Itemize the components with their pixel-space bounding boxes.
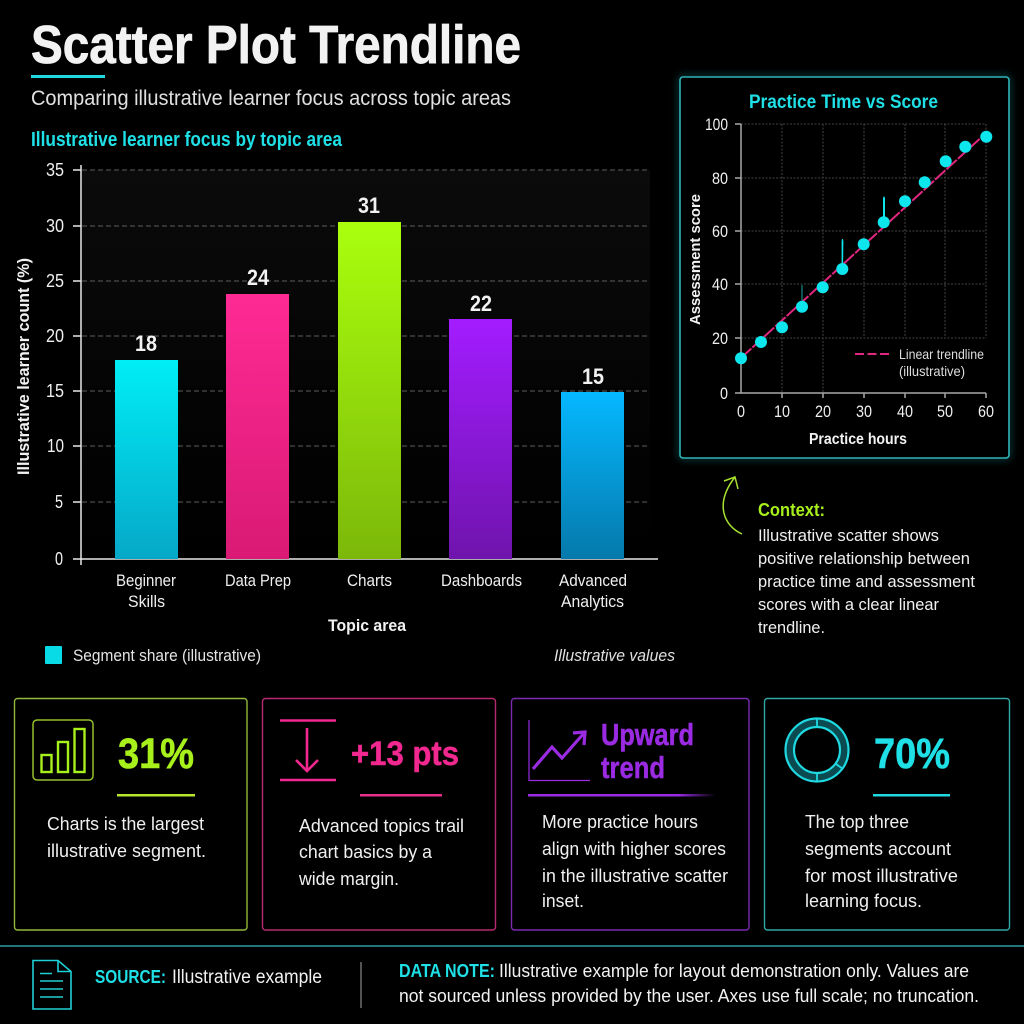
card text: segments account bbox=[805, 839, 951, 859]
category labels: Advanced bbox=[559, 571, 627, 590]
category labels: Charts bbox=[347, 571, 392, 590]
source: Illustrative example bbox=[172, 967, 322, 988]
stat: 31%: 31% bbox=[118, 730, 194, 778]
context callout: scores with a clear linear bbox=[758, 595, 939, 614]
bar: Beginner Skills bbox=[115, 331, 178, 559]
icon: donut bbox=[786, 718, 848, 782]
category labels: Data Prep bbox=[225, 571, 291, 590]
card text: learning focus. bbox=[805, 891, 922, 911]
panel: scatter inset: 60 bbox=[712, 222, 728, 241]
bar chart: 35 bbox=[46, 160, 64, 180]
data note bbox=[399, 961, 979, 1006]
bar chart: 15 bbox=[46, 381, 64, 401]
footer bbox=[0, 946, 1024, 1009]
subtitle: Comparing illustrative learner focus across topic areas bbox=[31, 87, 511, 110]
panel: scatter inset: 40 bbox=[897, 402, 913, 421]
bar: Data Prep bbox=[226, 265, 289, 559]
card text: Charts is the largest bbox=[47, 814, 204, 834]
category labels: Analytics bbox=[561, 592, 624, 611]
panel: scatter inset bbox=[680, 77, 1009, 458]
card text bbox=[805, 812, 958, 911]
context callout bbox=[758, 500, 975, 637]
title: Scatter Plot Trendline bbox=[31, 15, 521, 75]
icon: document bbox=[33, 960, 71, 1009]
data note: Illustrative example for layout demonstration only. Values are bbox=[499, 961, 969, 981]
icon: down arrow gap bbox=[280, 720, 336, 780]
stat: upward trend bbox=[601, 717, 694, 785]
card text: More practice hours bbox=[542, 812, 698, 832]
bar chart: 5 bbox=[55, 492, 63, 512]
category labels: Beginner bbox=[116, 571, 176, 590]
category labels bbox=[116, 571, 627, 611]
source bbox=[95, 967, 322, 988]
panel: scatter inset: 20 bbox=[815, 402, 831, 421]
card text: for most illustrative bbox=[805, 866, 958, 886]
panel: scatter inset: 0 bbox=[737, 402, 745, 421]
panel: card charts bbox=[14, 698, 247, 930]
bar: Charts: 31 bbox=[358, 193, 380, 218]
panel: scatter inset: 30 bbox=[856, 402, 872, 421]
source: SOURCE: bbox=[95, 967, 166, 987]
bar: Charts bbox=[338, 193, 401, 559]
bar: Dashboards: 22 bbox=[470, 291, 492, 316]
data note: not sourced unless provided by the user. Axes use full scale; no truncation. bbox=[399, 986, 979, 1006]
stat: upward trend: Upward bbox=[601, 717, 694, 752]
stat: 70%: 70% bbox=[874, 730, 950, 778]
stat: +13 pts: +13 pts bbox=[351, 735, 459, 773]
scatter legend: (illustrative) bbox=[899, 363, 965, 379]
context callout: Illustrative scatter shows bbox=[758, 526, 939, 545]
card text: wide margin. bbox=[298, 869, 399, 889]
card text: chart basics by a bbox=[299, 842, 433, 862]
category labels: Skills bbox=[128, 592, 165, 611]
bar: Dashboards bbox=[449, 291, 512, 559]
scatter axis titles: Practice hours bbox=[809, 431, 907, 448]
bar: Beginner Skills: 18 bbox=[135, 331, 157, 356]
card text: Advanced topics trail bbox=[299, 816, 464, 836]
icon: trend arrow bbox=[529, 720, 590, 780]
bar chart: 25 bbox=[46, 271, 64, 291]
scatter points bbox=[735, 131, 992, 364]
icon: bar chart bbox=[33, 720, 93, 780]
data note: DATA NOTE: bbox=[399, 961, 495, 981]
panel: card advanced gap bbox=[262, 698, 496, 930]
panel: scatter inset: 60 bbox=[978, 402, 994, 421]
panel: scatter inset: 40 bbox=[712, 275, 728, 294]
scatter axis titles bbox=[687, 194, 907, 448]
card text bbox=[298, 816, 464, 889]
bar chart: 30 bbox=[46, 216, 64, 236]
x axis title: Topic area bbox=[328, 616, 406, 635]
scatter legend: Linear trendline bbox=[899, 346, 984, 362]
context callout: trendline. bbox=[758, 618, 825, 637]
bar: Advanced Analytics bbox=[561, 364, 624, 559]
bar: Advanced Analytics: 15 bbox=[582, 364, 604, 389]
context callout: practice time and assessment bbox=[758, 572, 975, 591]
bar: Data Prep: 24 bbox=[247, 265, 270, 290]
illustrative values note: Illustrative values bbox=[554, 646, 675, 665]
scatter axis titles: Assessment score bbox=[687, 194, 704, 325]
chart legend: Segment share (illustrative) bbox=[73, 646, 261, 665]
panel: scatter inset: 80 bbox=[712, 169, 728, 188]
y axis title: Illustrative learner count (%) bbox=[14, 258, 33, 475]
panel: card top three bbox=[764, 698, 1010, 930]
panel: scatter inset: 10 bbox=[774, 402, 790, 421]
bar chart: 0 bbox=[55, 549, 63, 569]
bar chart bbox=[14, 160, 658, 635]
context callout: Context: bbox=[758, 500, 825, 520]
scatter legend bbox=[855, 346, 984, 379]
panel: scatter inset: 0 bbox=[720, 384, 728, 403]
panel: scatter inset: 50 bbox=[937, 402, 953, 421]
bar chart: 10 bbox=[47, 436, 64, 456]
card text: inset. bbox=[542, 891, 584, 911]
card text: The top three bbox=[805, 812, 909, 832]
panel: scatter inset: 100 bbox=[705, 115, 728, 134]
context callout: positive relationship between bbox=[758, 549, 970, 568]
arrow: context pointer bbox=[723, 477, 742, 534]
panel: card upward trend bbox=[512, 698, 749, 930]
category labels: Dashboards bbox=[441, 571, 522, 590]
card text: illustrative segment. bbox=[47, 841, 206, 861]
bar chart: 20 bbox=[46, 326, 64, 346]
card text: align with higher scores bbox=[542, 839, 726, 859]
card text bbox=[542, 812, 728, 911]
card text bbox=[47, 814, 206, 861]
stat: upward trend: trend bbox=[601, 750, 665, 785]
scatter title: Practice Time vs Score bbox=[749, 92, 938, 113]
trendline bbox=[741, 133, 986, 358]
card text: in the illustrative scatter bbox=[542, 866, 728, 886]
panel: scatter inset: 20 bbox=[712, 329, 728, 348]
chart heading: Illustrative learner focus by topic area bbox=[31, 129, 343, 151]
